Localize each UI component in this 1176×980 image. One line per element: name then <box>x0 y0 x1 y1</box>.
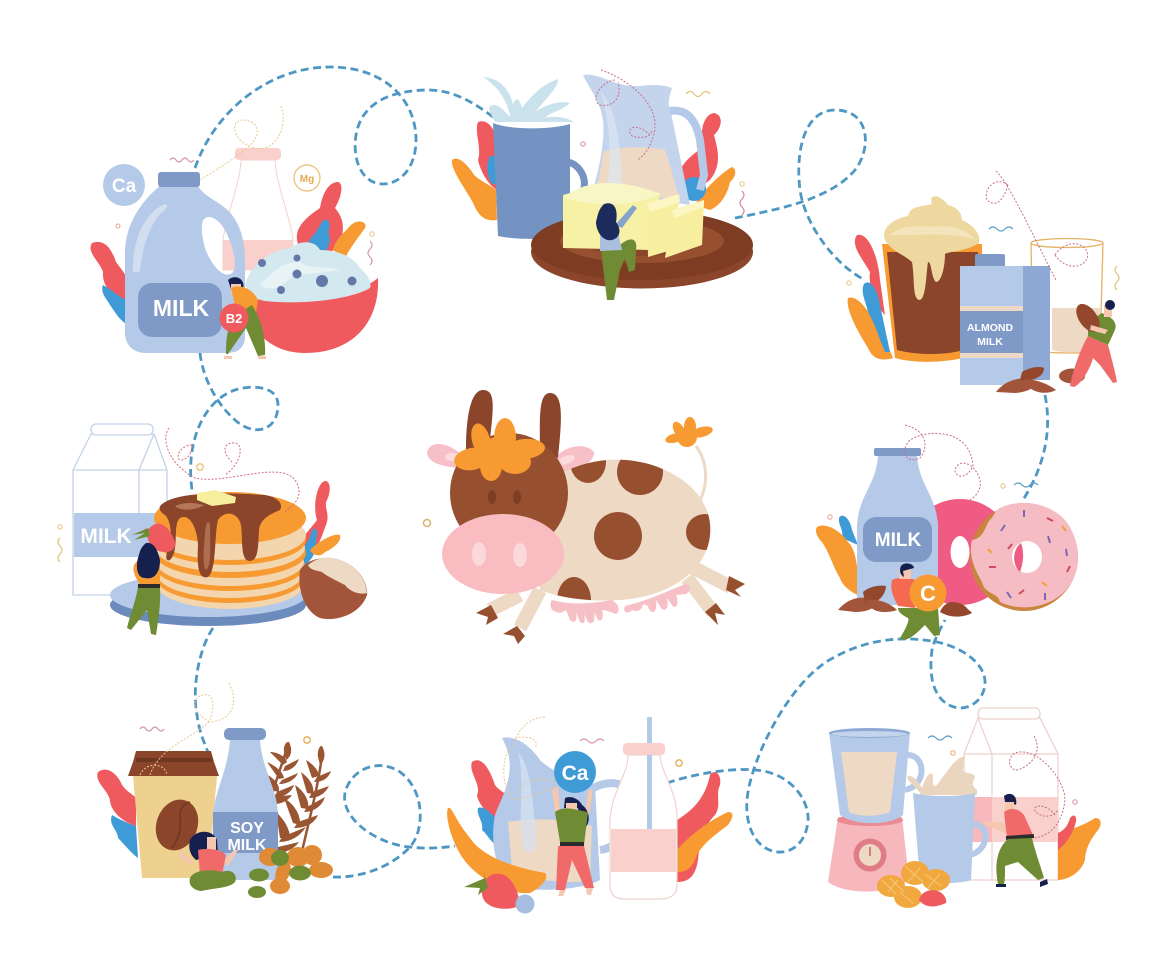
butter pat <box>197 490 236 506</box>
bottle behind <box>223 148 293 270</box>
ears <box>427 444 594 472</box>
carton <box>964 708 1058 880</box>
leaves right <box>297 182 366 258</box>
wood board <box>531 210 753 288</box>
glass jug <box>583 75 704 205</box>
cluster: blender, mug and carton <box>828 708 1101 908</box>
wheat <box>266 742 331 870</box>
udder <box>550 584 690 623</box>
glass <box>1031 238 1103 353</box>
mug <box>913 793 985 883</box>
almond milk carton: MILK <box>977 336 1003 348</box>
pink donut <box>907 499 1013 605</box>
Ca badge: Ca <box>562 762 589 785</box>
mug <box>493 123 584 239</box>
man pushing carton <box>983 794 1048 887</box>
decorative leaves left <box>91 242 128 324</box>
legs <box>476 566 745 644</box>
strawberry <box>132 524 175 552</box>
soy milk bottle: MILK <box>227 837 267 854</box>
bowl <box>245 278 378 353</box>
Ca badge <box>103 164 145 206</box>
cluster: milk bottle and donuts <box>816 425 1078 640</box>
dotted squiggle <box>173 106 283 245</box>
leaves right <box>677 772 733 882</box>
tail <box>664 417 714 500</box>
Mg badge: Mg <box>300 174 314 185</box>
seated woman <box>178 832 238 891</box>
almonds <box>838 586 972 617</box>
man with C badge <box>891 563 946 640</box>
leaves <box>848 235 893 360</box>
milk jug: MILK <box>153 295 209 321</box>
milk carton: MILK <box>80 525 132 548</box>
person holding stack <box>127 543 160 635</box>
soy milk bottle: SOY <box>230 820 264 837</box>
stack of pancakes <box>154 492 306 609</box>
almonds <box>996 367 1085 393</box>
leaves <box>1058 816 1101 880</box>
coconut <box>299 558 367 619</box>
beans <box>248 845 333 898</box>
milk bottle with straw <box>610 717 677 899</box>
almond milk carton <box>960 254 1050 385</box>
man with C badge: C <box>920 581 936 606</box>
cluster: jug, calcium and bottle <box>447 717 733 914</box>
milk carton <box>73 424 167 595</box>
woman lifting Ca <box>552 786 594 896</box>
horns <box>466 390 561 458</box>
pasta <box>877 861 950 908</box>
glass jug <box>493 737 632 890</box>
glazed donut <box>970 503 1078 611</box>
milk bottle: MILK <box>875 530 921 551</box>
climbing person <box>596 203 637 300</box>
butter <box>563 183 704 258</box>
coffee cup <box>128 751 219 878</box>
leaves <box>97 770 138 858</box>
infographic canvas <box>57 66 1120 914</box>
strawberry <box>464 868 520 909</box>
Ca badge <box>554 751 596 793</box>
splash <box>907 756 977 795</box>
cluster: milk jug, bottle and cottage cheese <box>91 106 378 359</box>
plate <box>110 573 306 626</box>
dashed connector paths <box>191 67 1048 877</box>
chocolate drizzle <box>160 493 281 577</box>
nostrils <box>472 542 527 567</box>
splash <box>483 77 574 122</box>
body <box>530 460 710 601</box>
Mg badge <box>294 165 320 191</box>
cluster: cream coffee and almond milk <box>847 171 1119 393</box>
snout <box>442 514 564 594</box>
milk jug <box>125 172 245 353</box>
banana <box>447 808 546 893</box>
cottage cheese <box>245 242 371 302</box>
Ca badge: Ca <box>112 176 137 197</box>
cluster: mug, jug and butter <box>452 70 753 300</box>
orange tuft <box>452 418 546 481</box>
small ring <box>424 520 430 526</box>
leaves <box>295 481 340 565</box>
spots <box>557 460 710 600</box>
blender <box>828 728 922 892</box>
almond milk carton: ALMOND <box>967 322 1013 334</box>
person with almond <box>1070 300 1117 387</box>
cluster: pancakes <box>58 424 367 635</box>
soy milk bottle <box>213 728 278 880</box>
cow <box>427 390 745 644</box>
coffee cup <box>882 196 982 362</box>
person with B2 <box>220 277 266 359</box>
cluster: coffee and soy milk <box>97 683 333 898</box>
leaves left <box>471 760 512 846</box>
head <box>450 433 568 553</box>
milk bottle <box>857 448 938 605</box>
person with B2: B2 <box>226 311 242 326</box>
blueberry <box>516 894 534 914</box>
eyes <box>488 490 521 504</box>
leaves <box>816 516 860 596</box>
leaves <box>452 113 735 220</box>
